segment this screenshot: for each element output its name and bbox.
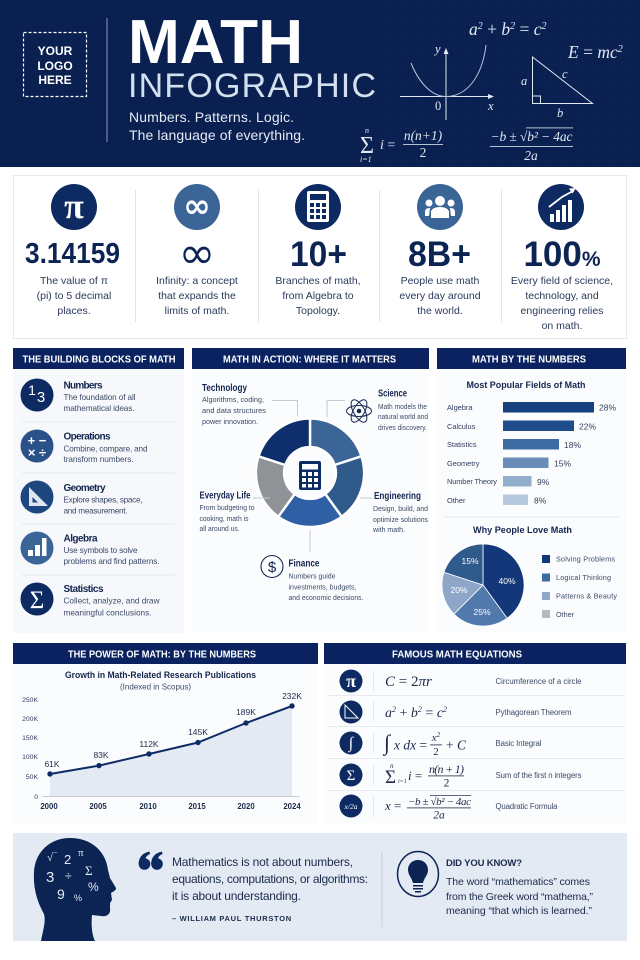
line chart: 2000 <box>40 802 58 811</box>
label: science: natural world and <box>378 412 428 421</box>
stat: people: every day around <box>399 290 481 302</box>
icon: head with symbols <box>34 838 116 941</box>
icon: head with symbols: ÷ <box>65 869 72 883</box>
icon: head with symbols: 9 <box>57 886 65 902</box>
equation: summation: n(n + 1) <box>429 762 464 776</box>
bar chart: 18% <box>564 440 581 450</box>
stat: pi: The value of π <box>40 275 108 287</box>
math formula decorations: 2a <box>524 148 538 163</box>
equation: pythagorean: = <box>422 706 437 721</box>
equation: integral: 2 <box>433 746 439 758</box>
item: statistics: Σ <box>30 587 44 614</box>
label: engineering: Design, build, and <box>373 504 428 513</box>
icon: head with symbols: √‾ <box>47 852 57 864</box>
stat: branches: Branches of math, <box>275 275 361 287</box>
line chart: 61K <box>44 759 60 769</box>
equation: integral: + C <box>446 738 467 752</box>
equation: integral <box>340 730 542 758</box>
heading <box>13 643 318 664</box>
legend <box>542 554 617 619</box>
label: science <box>378 388 428 432</box>
legend: Patterns & Beauty <box>556 592 617 600</box>
equation: summation: i=1 <box>398 779 407 785</box>
icon: people <box>417 184 463 230</box>
stat: infinity: limits of math. <box>165 305 229 317</box>
item: operations: Operations <box>64 432 111 442</box>
tagline <box>129 109 305 143</box>
bar chart: Other <box>447 496 466 505</box>
line chart: 232K <box>282 691 302 701</box>
label: everyday life: cooking, math is <box>200 514 249 523</box>
bar chart: 8% <box>534 496 547 506</box>
item: numbers <box>20 378 136 413</box>
bar chart: Number Theory <box>447 477 497 486</box>
bar chart: Statistics <box>447 440 477 449</box>
stat: infinity: that expands the <box>158 290 236 302</box>
item: geometry: Explore shapes, space, <box>64 496 142 504</box>
equation: integral: ∫ <box>348 735 355 753</box>
math formula decorations: = <box>515 19 534 39</box>
stat: people: the world. <box>417 305 463 317</box>
line chart: 2015 <box>188 802 206 811</box>
math formula decorations: 2 <box>542 21 547 32</box>
icon: head with symbols: 2 <box>64 852 71 867</box>
pie chart: 25% <box>473 607 491 617</box>
math formula decorations: −b ± √b² − 4ac <box>490 129 572 144</box>
math formula decorations: a <box>469 19 478 39</box>
math formula decorations: n(n+1) <box>404 128 443 143</box>
equation: pythagorean: 2 <box>392 705 396 714</box>
equation: quadratic: x/2a <box>344 802 358 811</box>
icon: head with symbols: 3 <box>46 869 54 886</box>
math formula decorations: x <box>487 99 494 113</box>
stat: pi: (pi) to 5 decimal <box>37 290 111 302</box>
label: finance: and economic decisions. <box>288 593 364 602</box>
equation: summation: n <box>390 762 394 770</box>
heading <box>13 348 184 369</box>
label: everyday life: From budgeting to <box>200 503 254 512</box>
equation: integral: ∫ <box>382 730 392 756</box>
line chart: 83K <box>93 750 109 760</box>
equation: pythagorean: c <box>437 706 443 721</box>
equation: circumference: C = 2πr <box>385 674 432 690</box>
heading: MATH IN ACTION: WHERE IT MATTERS <box>223 354 396 366</box>
line chart: 2005 <box>89 802 107 811</box>
stat: percent <box>511 184 613 332</box>
math formula decorations: Σ <box>360 133 374 159</box>
stat: people: People use math <box>401 275 480 287</box>
line chart: 112K <box>139 739 159 749</box>
heading: MATH BY THE NUMBERS <box>472 354 586 366</box>
bar chart: 28% <box>599 402 616 412</box>
label: technology: Algorithms, coding, <box>202 395 264 404</box>
stat: infinity <box>156 184 238 317</box>
heading: THE POWER OF MATH: BY THE NUMBERS <box>68 648 256 660</box>
equation: circumference <box>340 670 582 692</box>
donut chart <box>256 418 364 527</box>
icon: head with symbols: π <box>78 847 84 859</box>
stat: percent: on math. <box>542 320 582 332</box>
stat: pi: places. <box>57 305 91 317</box>
quote text: equations, computations, or algorithms: <box>172 872 368 886</box>
equation: pythagorean <box>340 700 572 724</box>
item: statistics: meaningful conclusions. <box>64 608 152 618</box>
math formula decorations: n <box>365 126 369 135</box>
item: operations: transform numbers. <box>64 455 134 464</box>
equation: pythagorean: 2 <box>443 705 447 714</box>
icon: growth chart <box>538 184 584 230</box>
item: geometry: Geometry <box>64 483 106 494</box>
bar chart: Most Popular Fields of Math <box>466 380 586 391</box>
label: everyday life <box>200 490 254 533</box>
stat: branches: from Algebra to <box>282 290 354 302</box>
item: statistics: Statistics <box>64 584 104 595</box>
equation: pythagorean: Pythagorean Theorem <box>496 708 572 717</box>
logo placeholder: LOGO <box>37 59 73 73</box>
line chart: Growth in Math-Related Research Publications <box>65 670 256 681</box>
label: science: drives discovery. <box>378 423 427 432</box>
bar chart: Geometry <box>447 459 480 468</box>
math formula decorations: + <box>483 19 501 39</box>
line chart <box>22 670 302 811</box>
header banner <box>0 0 640 167</box>
line chart: 0 <box>34 794 38 801</box>
stat: percent: 100% <box>523 235 601 274</box>
title: INFOGRAPHIC <box>128 67 376 105</box>
line chart: 150K <box>22 735 38 742</box>
item: numbers: Numbers <box>64 380 103 392</box>
equation: pythagorean: 2 <box>418 705 422 714</box>
panel: math in action <box>192 348 429 633</box>
legend: Solving Problems <box>556 554 615 564</box>
math formula decorations: c <box>562 67 568 81</box>
line chart: 2024 <box>283 802 301 811</box>
quote text: it is about understanding. <box>172 889 301 903</box>
item: statistics <box>20 582 160 618</box>
icon: dollar <box>261 556 283 578</box>
item: numbers: mathematical ideas. <box>64 404 134 413</box>
icon: head with symbols: Σ <box>85 863 93 878</box>
line chart: 50K <box>26 774 38 781</box>
equation: pythagorean: a <box>385 706 392 721</box>
quote text <box>172 855 368 923</box>
item: operations <box>20 430 148 464</box>
line chart: 2020 <box>237 802 255 811</box>
did you know: DID YOU KNOW? <box>446 858 522 869</box>
equation: quadratic: Quadratic Formula <box>496 802 558 811</box>
did you know: from the Greek word “mathema,” <box>446 891 594 903</box>
label: technology: Technology <box>202 383 247 394</box>
panel: math by the numbers <box>437 348 626 633</box>
item: geometry: and measurement. <box>64 506 128 516</box>
equation: quadratic: 2a <box>433 810 445 822</box>
label: science: Science <box>378 388 407 400</box>
line chart: 2010 <box>139 802 157 811</box>
label: finance: Numbers guide <box>288 572 336 580</box>
item: operations: + − <box>28 433 47 448</box>
equation: summation: i = <box>408 768 422 783</box>
line chart: 200K <box>22 716 38 723</box>
icon: head with symbols: % <box>74 893 82 903</box>
heading: FAMOUS MATH EQUATIONS <box>392 648 522 660</box>
item: numbers: The foundation of all <box>64 393 136 402</box>
stat: branches: 10+ <box>290 235 347 274</box>
equation: summation: 2 <box>444 778 450 790</box>
legend: Logical Thinking <box>556 573 611 582</box>
panel: key stats <box>14 176 626 338</box>
icon: calculator <box>295 184 341 230</box>
icon: quote mark <box>139 852 163 870</box>
item: algebra: Algebra <box>64 534 98 544</box>
bar chart: 9% <box>537 477 550 487</box>
title <box>128 8 376 105</box>
stat: percent: engineering relies <box>521 305 603 317</box>
icon: light bulb <box>398 852 438 896</box>
line chart: 145K <box>188 727 208 737</box>
stat: percent: Every field of science, <box>511 275 613 287</box>
stat: infinity: ∞ <box>179 228 215 279</box>
logo placeholder <box>24 32 86 96</box>
panel: research growth line chart <box>13 643 318 823</box>
item: algebra: problems and find patterns. <box>64 557 160 566</box>
stat: people <box>399 184 481 317</box>
equation: summation: Sum of the first n integers <box>496 771 582 780</box>
math formula decorations: i = <box>380 138 395 153</box>
label: science: Math models the <box>378 402 427 411</box>
label: finance: Finance <box>288 558 320 570</box>
did you know: The word “mathematics” comes <box>446 876 590 888</box>
icon: pi: π <box>64 186 84 226</box>
stat: pi <box>25 184 120 317</box>
bar chart: 15% <box>554 458 571 468</box>
pie chart: 40% <box>498 576 516 586</box>
panel: quote and fact <box>13 833 627 941</box>
heading: THE BUILDING BLOCKS OF MATH <box>22 354 176 366</box>
label: engineering: optimize solutions <box>373 515 428 524</box>
label: everyday life: Everyday Life <box>200 490 251 502</box>
line chart: (Indexed in Scopus) <box>120 682 191 692</box>
line chart: 189K <box>236 707 256 717</box>
tagline: Numbers. Patterns. Logic. <box>129 109 294 125</box>
math formula decorations <box>360 19 623 164</box>
label: everyday life: all around us. <box>200 524 240 533</box>
math formula decorations: 2 <box>618 44 623 55</box>
bar chart: Calculus <box>447 422 476 431</box>
stat: branches <box>275 184 361 317</box>
math formula decorations: b <box>501 19 510 39</box>
label: engineering: Engineering <box>374 491 421 502</box>
item: numbers: 3 <box>37 389 45 406</box>
math formula decorations: c <box>534 19 542 39</box>
icon: atom <box>346 397 372 425</box>
quote text: Mathematics is not about numbers, <box>172 855 353 869</box>
item: algebra <box>20 532 160 566</box>
label: engineering: with math. <box>372 525 405 534</box>
legend: Other <box>556 610 575 619</box>
pie chart: Why People Love Math <box>473 525 572 536</box>
label: engineering <box>372 491 428 534</box>
label: finance <box>288 558 364 602</box>
icon: calculator <box>299 461 321 490</box>
equation: summation: Σ <box>347 768 355 784</box>
panel: famous equations <box>324 643 626 823</box>
equation: summation: Σ <box>385 767 396 788</box>
equation: circumference: π <box>346 671 356 691</box>
equation: integral: x dx = <box>393 738 427 752</box>
equation: quadratic: x = <box>384 798 401 813</box>
title: MATH <box>128 8 303 77</box>
equation: pythagorean: + <box>396 706 411 721</box>
math formula decorations: 2 <box>510 21 515 32</box>
tagline: The language of everything. <box>129 127 305 143</box>
stat: people: 8B+ <box>408 235 471 274</box>
math formula decorations: b <box>557 106 563 120</box>
label: technology: power innovation. <box>202 417 258 426</box>
pie chart: 20% <box>450 585 468 595</box>
bar chart: 22% <box>579 422 596 432</box>
item: statistics: Collect, analyze, and draw <box>64 596 160 606</box>
pie chart <box>442 525 617 626</box>
did you know <box>446 858 594 917</box>
line chart: 250K <box>22 697 38 704</box>
label: finance: investments, budgets, <box>288 582 356 592</box>
equation: quadratic <box>340 794 558 822</box>
heading <box>192 348 429 369</box>
item: geometry <box>20 480 142 516</box>
equation: circumference: Circumference of a circle <box>496 677 582 686</box>
math formula decorations: 0 <box>435 99 441 113</box>
item: operations: × ÷ <box>28 445 46 460</box>
stat: pi: 3.14159 <box>25 238 120 270</box>
math formula decorations: a <box>521 74 527 88</box>
math formula decorations: 2 <box>420 145 426 160</box>
did you know: meaning “that which is learned.” <box>446 905 592 917</box>
logo placeholder: YOUR <box>38 44 73 58</box>
panel: building blocks <box>13 348 184 633</box>
equation: quadratic: −b ± √b² − 4ac <box>408 796 471 808</box>
item: algebra: Use symbols to solve <box>64 546 138 555</box>
pie chart: 15% <box>461 556 479 566</box>
equation: pythagorean: b <box>411 706 418 721</box>
stat: percent: technology, and <box>525 290 599 302</box>
equation: summation <box>340 762 582 790</box>
quote text: – WILLIAM PAUL THURSTON <box>172 914 292 923</box>
icon: infinity: ∞ <box>183 186 211 225</box>
math formula decorations: i=1 <box>360 155 372 164</box>
equation: integral: 2 <box>437 731 441 739</box>
heading <box>324 643 626 664</box>
equation: integral: Basic Integral <box>496 739 542 748</box>
line chart: 100K <box>22 754 38 761</box>
item: operations: Combine, compare, and <box>64 444 148 454</box>
item: numbers: 1 <box>28 382 36 398</box>
icon: dollar: $ <box>268 559 277 576</box>
heading <box>437 348 626 369</box>
stat: branches: Topology. <box>296 305 340 317</box>
bar chart <box>447 380 616 506</box>
bar chart: Algebra <box>447 403 473 412</box>
math formula decorations: y <box>433 42 441 56</box>
math formula decorations: 2 <box>478 21 483 32</box>
label: technology: and data structures <box>202 406 266 415</box>
stat: infinity: Infinity: a concept <box>156 275 238 287</box>
logo placeholder: HERE <box>38 73 72 87</box>
math formula decorations: E = mc <box>568 42 618 62</box>
equation: integral: x <box>432 732 437 744</box>
icon: head with symbols: % <box>88 880 99 894</box>
label: technology <box>202 383 266 426</box>
